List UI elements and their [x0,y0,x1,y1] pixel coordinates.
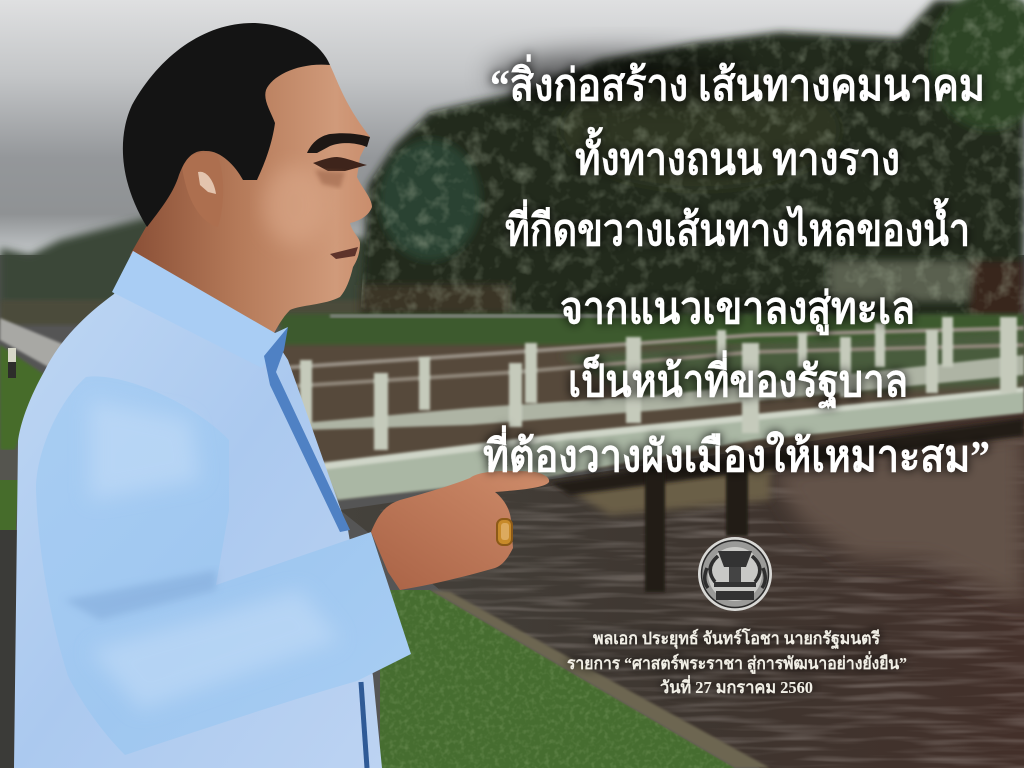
ear [182,153,223,227]
quote text: ทั้งทางถนน ทางราง [575,126,900,184]
cheek highlight [263,165,327,245]
distant tree line [0,218,380,312]
neck and face [130,50,372,335]
under-bridge light bank [570,465,770,515]
sleeve highlights [90,400,340,710]
eye bag shadow [315,170,345,188]
foreground lawn [380,590,735,768]
attribution text: วันที่ 27 มกราคม 2560 [660,675,813,697]
hand pointing [371,471,549,590]
bridge pillars [645,468,748,592]
person: man in light-blue suit pointing [14,23,549,768]
sky [0,0,1024,255]
far olive strip [0,300,400,325]
hair [123,23,330,227]
suit body [14,251,382,768]
placket [264,327,350,532]
left road [0,318,65,368]
icon: government seal [698,537,772,611]
pale far path [330,314,630,318]
dark glow behind quote [490,53,750,97]
collar [112,251,288,368]
attribution text: รายการ “ศาสตร์พระราชา สู่การพัฒนาอย่างยั่งยืน” [567,651,907,675]
mouth [330,247,358,259]
left lawn [0,345,45,450]
quote text: จากแนวเขาลงสู่ทะเล [560,284,915,335]
sleeve [36,376,411,755]
attribution text: พลเอก ประยุทธ์ จันทร์โอชา นายกรัฐมนตรี [593,628,881,650]
quote text: “สิ่งก่อสร้าง เส้นทางคมนาคม [490,54,985,110]
quote text: เป็นหน้าที่ของรัฐบาล [568,350,908,409]
quote text [483,54,990,481]
ring [497,519,512,545]
dark reach shadow [550,418,1024,495]
canal edge [430,590,770,768]
road marker [8,348,16,378]
hearing aid [198,172,216,194]
green bank right [560,330,1024,400]
far-side concrete bank [770,430,1024,605]
far lawn [280,314,1024,352]
bridge with white railing [280,317,1024,500]
lower bank earth [270,345,1024,500]
attribution text [567,628,907,697]
sleeve fold shadow [64,570,216,620]
water [340,410,1024,768]
eyebrow [307,133,370,153]
front seam [361,682,367,768]
trees [360,0,1024,320]
eye [313,157,367,171]
